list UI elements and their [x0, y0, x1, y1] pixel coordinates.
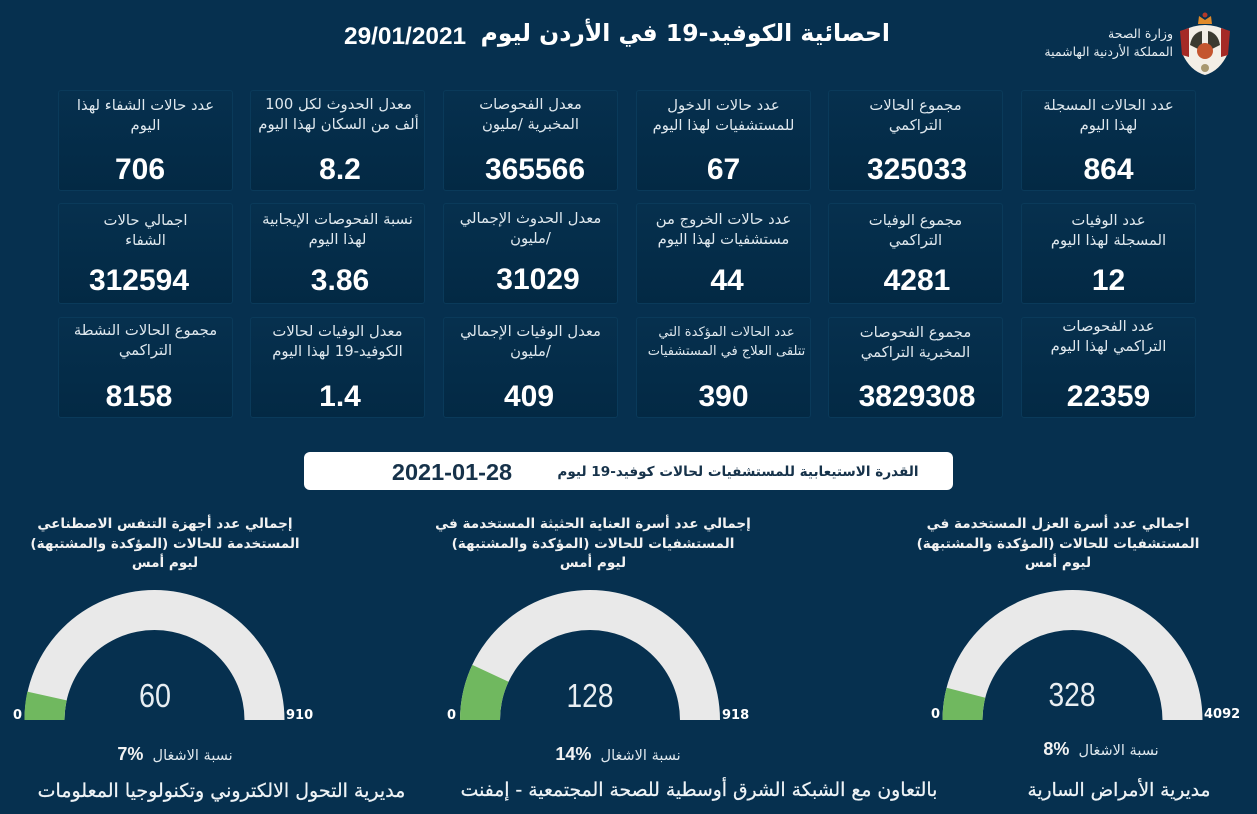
gauge: isolation beds: 328	[1048, 676, 1096, 713]
heading: ventilators: إجمالي عدد أجهزة التنفس الاصطناعي	[37, 516, 293, 532]
card: hospital admissions: 67	[707, 153, 740, 186]
ministry name	[1044, 26, 1173, 59]
card: hospital discharges: 44	[710, 264, 744, 297]
card: confirmed in hospital: عدد الحالات المؤكدة التي	[658, 325, 795, 340]
heading: isolation beds: المستشفيات للحالات (المؤكدة والمشتبهة)	[917, 536, 1199, 552]
card: cumulative cases: 325033	[867, 153, 967, 186]
card: daily cases	[1021, 90, 1196, 191]
title date: 29/01/2021	[344, 23, 466, 50]
title	[344, 18, 890, 50]
card: tests per million	[443, 90, 618, 191]
card: hospital admissions: للمستشفيات لهذا اليوم	[653, 117, 794, 134]
credit: communicable diseases directorate: مديرية الأمراض السارية	[1028, 780, 1210, 801]
card: confirmed in hospital: 390	[698, 380, 749, 413]
credit: digital transformation directorate: مديرية التحول الالكتروني وتكنولوجيا المعلومات	[38, 780, 405, 802]
card: cumulative cases	[828, 90, 1003, 191]
card: daily tests	[1021, 317, 1196, 418]
card: daily recoveries: اليوم	[131, 117, 160, 134]
gauge min: isolation beds: 0	[931, 707, 940, 722]
card: positivity rate	[250, 203, 425, 304]
card: hospital admissions	[636, 90, 811, 191]
gauge max: ventilators: 910	[286, 708, 313, 723]
card: total recoveries	[58, 203, 233, 304]
ministry name: وزارة الصحة	[1108, 26, 1173, 41]
occupancy: isolation beds: نسبة الاشغال 8%	[1043, 739, 1159, 759]
card: total recoveries: 312594	[89, 264, 189, 297]
card: total incidence per million	[443, 203, 618, 304]
card: daily tests: عدد الفحوصات	[1062, 318, 1155, 335]
gauge min: ICU beds: 0	[447, 708, 456, 723]
card: total deaths per million: 409	[504, 380, 554, 413]
card: hospital admissions: عدد حالات الدخول	[667, 97, 780, 114]
title text: احصائية الكوفيد-19 في الأردن ليوم	[481, 19, 890, 47]
card: cumulative tests	[828, 317, 1003, 418]
card: cumulative tests: المخبرية التراكمي	[861, 344, 970, 361]
card: total recoveries: الشفاء	[125, 232, 166, 249]
card: cumulative tests: 3829308	[859, 380, 975, 413]
card: daily deaths	[1021, 203, 1196, 304]
card: daily recoveries: عدد حالات الشفاء لهذا	[77, 97, 214, 114]
card: total incidence per million: /مليون	[510, 230, 551, 247]
heading: ventilators: المستخدمة للحالات (المؤكدة والمشتبهة)	[30, 536, 300, 552]
card: total deaths per million: معدل الوفيات الإجمالي	[460, 323, 601, 340]
card: tests per million: المخبرية /مليون	[482, 116, 579, 133]
gauge: ICU beds	[460, 590, 720, 720]
card: daily recoveries	[58, 90, 233, 191]
card: cumulative active cases: التراكمي	[119, 342, 172, 359]
card: hospital discharges	[636, 203, 811, 304]
card: total incidence per million: 31029	[496, 263, 580, 296]
heading: ventilators	[30, 514, 300, 571]
card: hospital discharges: مستشفيات لهذا اليوم	[658, 231, 789, 248]
card: cumulative active cases: 8158	[106, 380, 172, 413]
card: daily cases: عدد الحالات المسجلة	[1043, 97, 1174, 114]
card: cumulative active cases	[58, 317, 233, 418]
heading: ICU beds: إجمالي عدد أسرة العناية الحثيثة المستخدمة في	[435, 516, 751, 532]
card: incidence per 100k: 8.2	[319, 153, 361, 186]
card: cumulative active cases: مجموع الحالات النشطة	[74, 322, 217, 339]
card: total incidence per million: معدل الحدوث الإجمالي	[460, 210, 601, 227]
credit: EMPHNET: بالتعاون مع الشبكة الشرق أوسطية للصحة المجتمعية - إمفنت	[461, 780, 937, 801]
card: daily cases: 864	[1083, 153, 1134, 186]
card: tests per million: معدل الفحوصات	[479, 96, 582, 113]
card: daily death rate	[250, 317, 425, 418]
icon: Jordan coat of arms	[1180, 12, 1230, 75]
heading: isolation beds: اجمالي عدد أسرة العزل المستخدمة في	[927, 516, 1189, 532]
card: cumulative deaths: مجموع الوفيات	[869, 212, 962, 229]
gauge min: ventilators: 0	[13, 708, 22, 723]
card: confirmed in hospital	[636, 317, 811, 418]
card: daily death rate: الكوفيد-19 لهذا اليوم	[272, 343, 403, 360]
card: cumulative cases: التراكمي	[889, 117, 942, 134]
card: hospital discharges: عدد حالات الخروج من	[656, 211, 791, 228]
heading: isolation beds: ليوم أمس	[1025, 555, 1091, 571]
card: daily deaths: المسجلة لهذا اليوم	[1051, 232, 1166, 249]
gauge: isolation beds	[942, 590, 1202, 720]
heading: isolation beds	[917, 514, 1199, 571]
card: daily deaths: عدد الوفيات	[1071, 212, 1146, 229]
banner heading: القدرة الاستيعابية للمستشفيات لحالات كوفيد-19 ليوم	[557, 464, 919, 480]
gauge max: ICU beds: 918	[722, 708, 749, 723]
card: cumulative deaths	[828, 203, 1003, 304]
card: daily tests: التراكمي لهذا اليوم	[1051, 338, 1166, 355]
card: cumulative cases: مجموع الحالات	[869, 97, 962, 114]
card: daily recoveries: 706	[115, 153, 165, 186]
hospital capacity banner	[304, 452, 953, 490]
heading: ventilators: ليوم أمس	[132, 555, 198, 571]
occupancy: ventilators: نسبة الاشغال 7%	[117, 744, 233, 764]
card: confirmed in hospital: تتلقى العلاج في المستشفيات	[648, 344, 805, 359]
card: positivity rate: 3.86	[311, 264, 369, 297]
card: daily cases: لهذا اليوم	[1080, 117, 1137, 134]
heading: ICU beds: المستشفيات للحالات (المؤكدة والمشتبهة)	[452, 536, 734, 552]
card: daily deaths: 12	[1092, 264, 1125, 297]
heading: ICU beds: ليوم أمس	[560, 555, 626, 571]
card: positivity rate: لهذا اليوم	[309, 231, 366, 248]
card: total recoveries: اجمالي حالات	[104, 212, 187, 229]
card: daily tests: 22359	[1067, 380, 1150, 413]
banner date: 2021-01-28	[392, 459, 512, 485]
gauge: ventilators: 60	[139, 677, 171, 714]
card: cumulative tests: مجموع الفحوصات	[860, 324, 971, 341]
card: incidence per 100k: معدل الحدوث لكل 100	[265, 96, 412, 113]
card: daily death rate: معدل الوفيات لحالات	[272, 323, 403, 340]
card: incidence per 100k	[250, 90, 425, 191]
card: daily death rate: 1.4	[319, 380, 361, 413]
card: tests per million: 365566	[485, 153, 585, 186]
card: positivity rate: نسبة الفحوصات الإيجابية	[262, 211, 413, 228]
gauge: ventilators	[24, 590, 284, 720]
card: total deaths per million: /مليون	[510, 343, 551, 360]
card: cumulative deaths: التراكمي	[889, 232, 942, 249]
stat cards	[58, 90, 1196, 418]
ministry name: المملكة الأردنية الهاشمية	[1044, 44, 1173, 59]
card: cumulative deaths: 4281	[884, 264, 950, 297]
gauge: ICU beds: 128	[566, 677, 614, 714]
heading: ICU beds	[435, 514, 751, 571]
card: incidence per 100k: ألف من السكان لهذا اليوم	[258, 116, 419, 133]
card: total deaths per million	[443, 317, 618, 418]
gauge max: isolation beds: 4092	[1204, 707, 1240, 722]
occupancy: ICU beds: نسبة الاشغال 14%	[555, 744, 681, 764]
